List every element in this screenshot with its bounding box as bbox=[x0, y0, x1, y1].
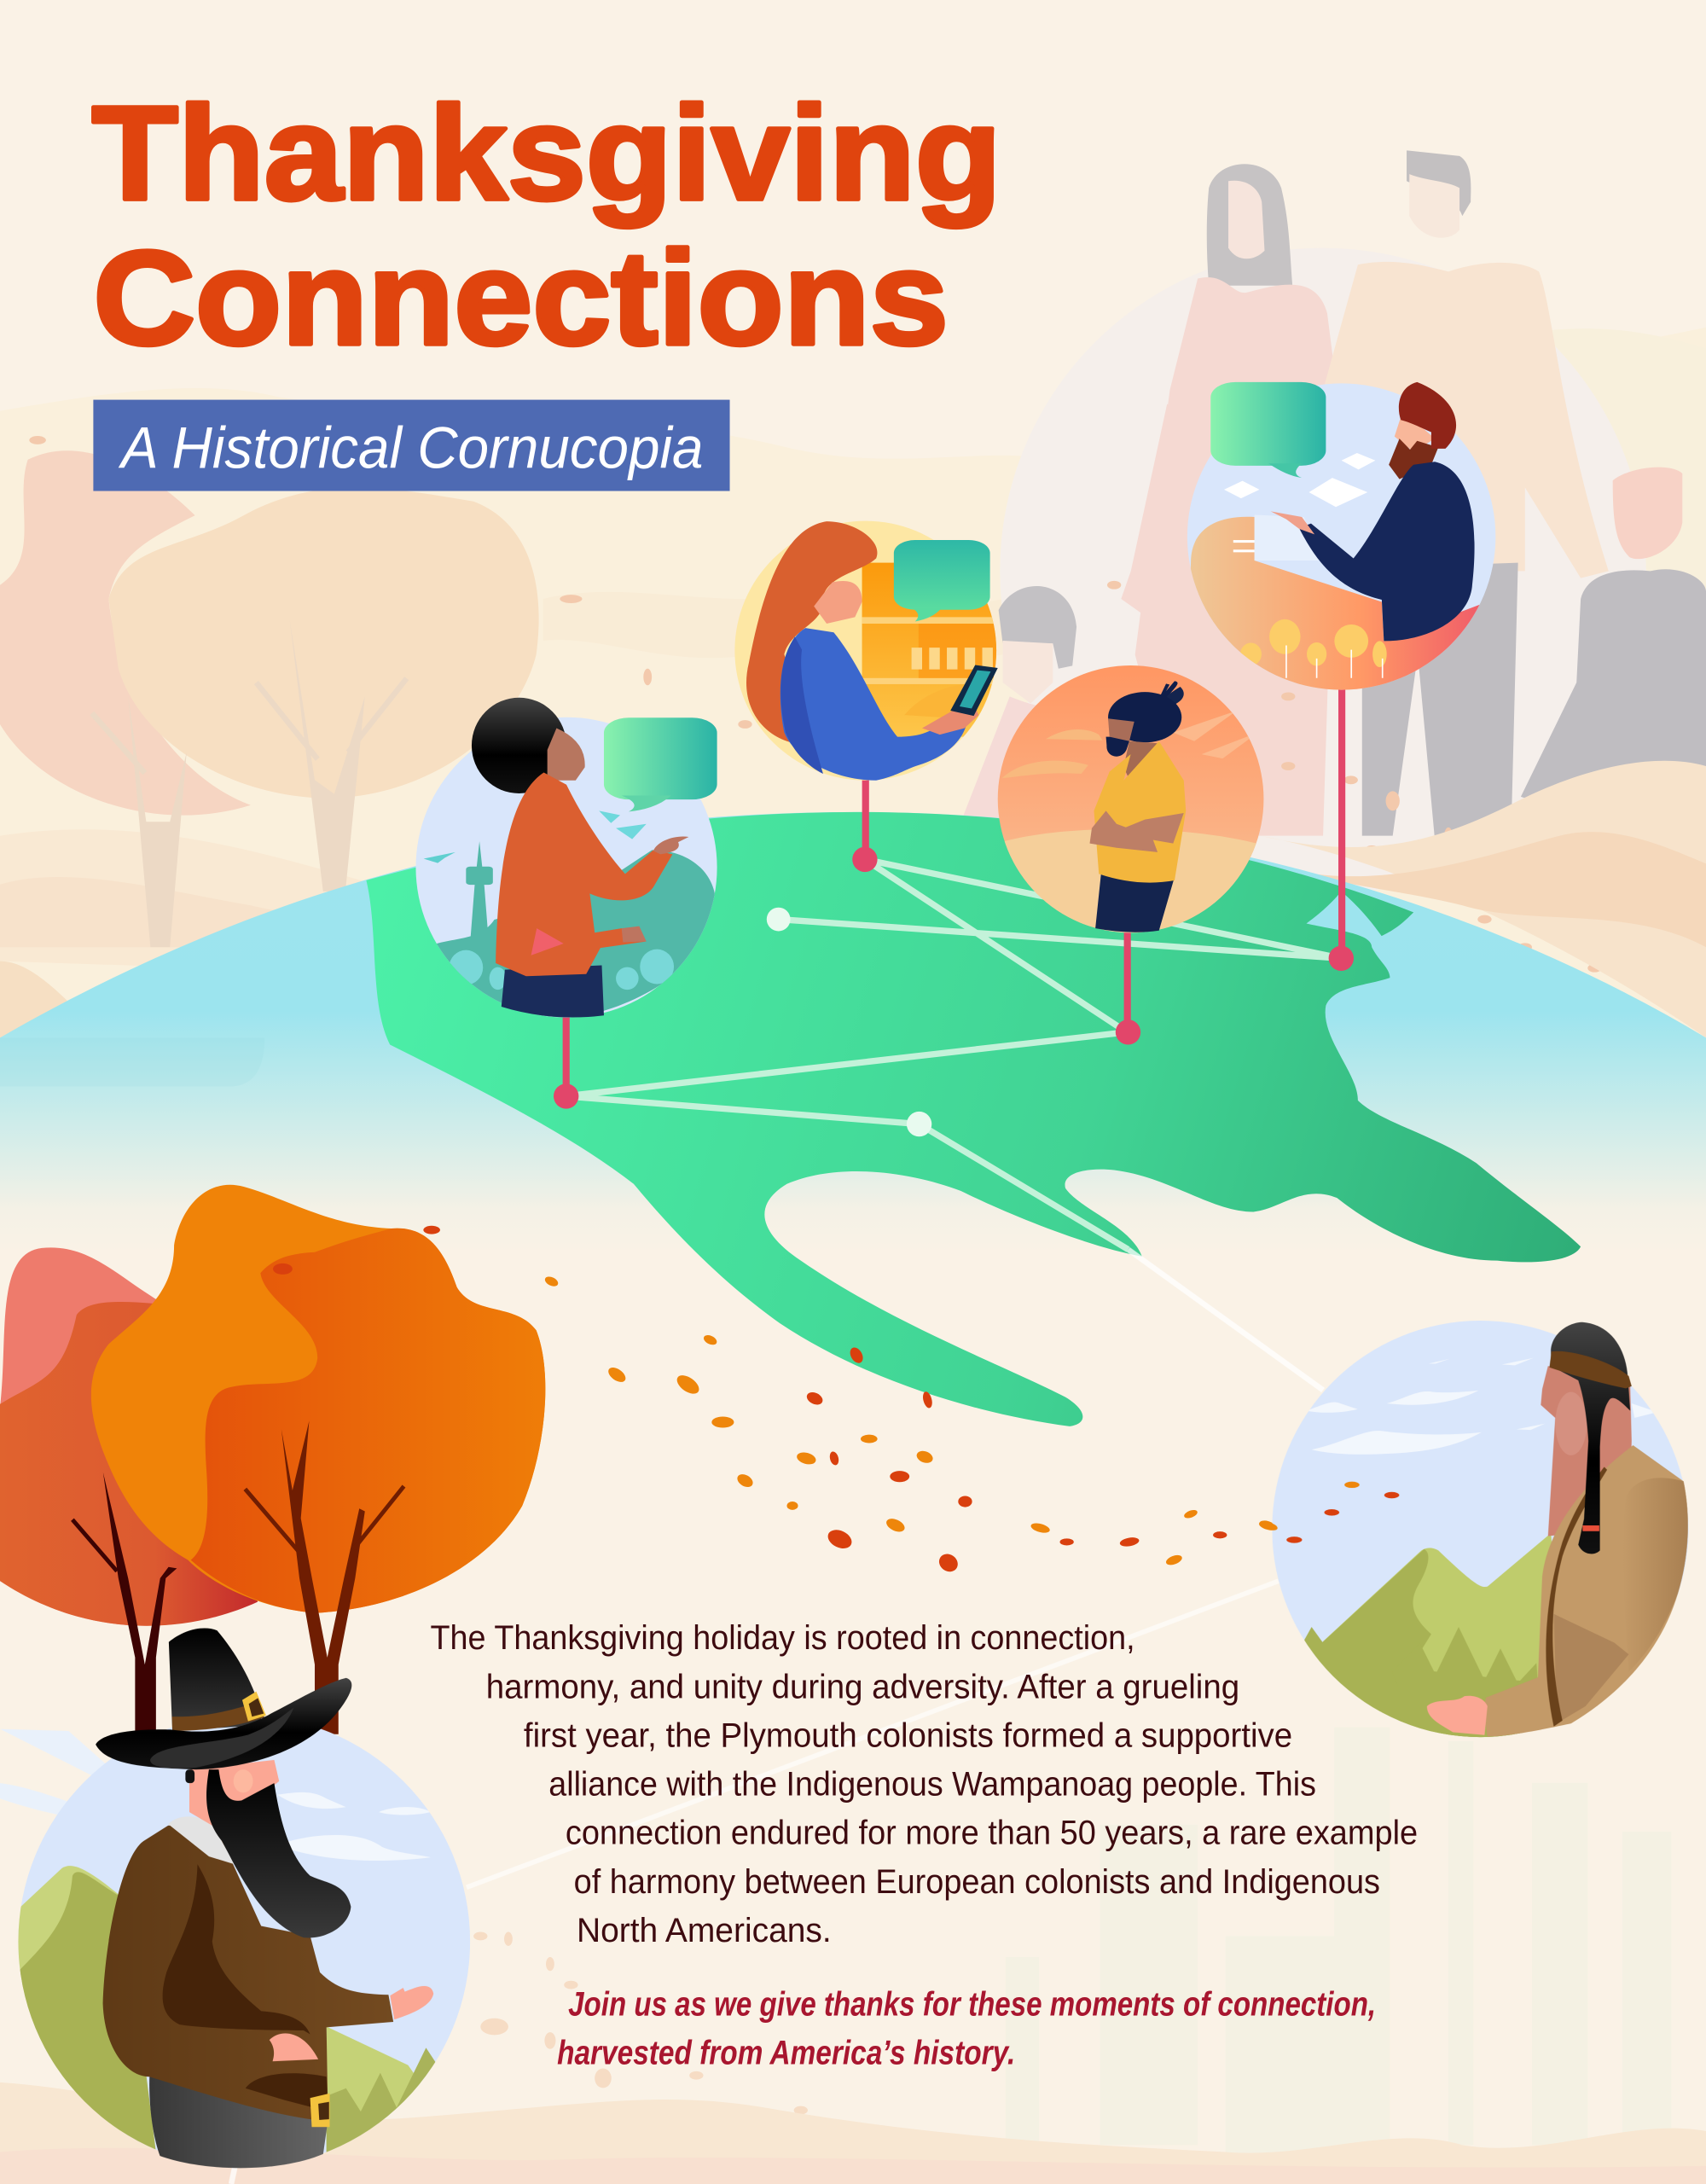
title line 1: Thanksgiving bbox=[92, 78, 1001, 228]
figure bbox=[1089, 681, 1186, 932]
face and beard bbox=[185, 1760, 351, 1937]
faded leaves bbox=[29, 436, 1649, 973]
faded hill over legs bbox=[1261, 761, 1706, 1037]
foreground autumn trees bbox=[0, 1185, 545, 1734]
closing call to action: harvested from America’s history. bbox=[557, 2035, 1015, 2072]
faded people bbox=[961, 150, 1706, 836]
person: phone woman bbox=[734, 521, 1000, 781]
teal scenery bbox=[424, 841, 716, 1018]
sky clouds trailing left bbox=[0, 1729, 186, 1827]
back red tree bbox=[0, 1247, 258, 1731]
title line 2: Connections bbox=[93, 224, 949, 373]
title bbox=[92, 78, 1001, 373]
circle with hills bbox=[18, 1716, 470, 2168]
body bbox=[1427, 1445, 1688, 1736]
person: yellow shirt bbox=[996, 665, 1265, 937]
bottom waves bbox=[0, 2082, 1706, 2184]
body text bbox=[431, 1619, 1418, 1949]
hat bbox=[96, 1628, 351, 1769]
front orange tree bbox=[91, 1185, 545, 1734]
store shelves bbox=[862, 563, 1000, 737]
network nodes bbox=[767, 908, 931, 1136]
person: orange sweater bbox=[415, 698, 717, 1018]
Wampanoag character bbox=[1254, 1321, 1688, 1758]
falling leaves bbox=[273, 1226, 1398, 1575]
closing call to action: Join us as we give thanks for these moments of connection, bbox=[568, 1986, 1376, 2024]
clouds bbox=[1224, 453, 1375, 507]
faded hills bbox=[0, 328, 1706, 1045]
globe bbox=[0, 812, 1706, 1253]
body text: North Americans. bbox=[577, 1912, 832, 1949]
head and neck bbox=[1541, 1366, 1632, 1536]
Pilgrim character bbox=[0, 1628, 473, 2184]
pins bbox=[554, 682, 1354, 1109]
body text: harmony, and unity during adversity. After a grueling bbox=[486, 1668, 1239, 1705]
figure bbox=[746, 521, 998, 781]
land and trees bbox=[1191, 515, 1479, 690]
hair and headband bbox=[1549, 1322, 1632, 1554]
network lines bbox=[566, 859, 1341, 1250]
white connection lines bbox=[231, 1250, 1323, 2184]
speech bubble bbox=[1210, 382, 1326, 478]
leaves in circle bbox=[1258, 1482, 1399, 1543]
body text: The Thanksgiving holiday is rooted in connection, bbox=[431, 1619, 1135, 1657]
figure bbox=[1271, 382, 1475, 641]
body text: of harmony between European colonists and Indigenous bbox=[574, 1863, 1380, 1901]
sunset scenery bbox=[996, 711, 1265, 937]
speech bubble bbox=[599, 717, 717, 839]
faint city at bottom bbox=[1006, 1728, 1671, 2159]
body text: first year, the Plymouth colonists formed a supportive bbox=[524, 1716, 1292, 1754]
body text: connection endured for more than 50 years, a rare example bbox=[566, 1815, 1418, 1852]
faded circle behind people bbox=[1000, 248, 1646, 894]
closing call to action bbox=[557, 1986, 1376, 2072]
continent bbox=[366, 812, 1581, 1426]
trousers bbox=[149, 2077, 328, 2168]
circle with hills bbox=[1272, 1321, 1688, 1737]
figure bbox=[472, 698, 688, 1017]
body text: alliance with the Indigenous Wampanoag people. This bbox=[548, 1766, 1316, 1804]
faded wave on right hill bbox=[1295, 832, 1706, 947]
subtitle banner bbox=[93, 400, 730, 491]
faded trees bbox=[0, 450, 539, 947]
person: navy sweater with beard bbox=[1187, 382, 1499, 698]
subtitle banner: A Historical Cornucopia bbox=[118, 415, 704, 481]
globe and map bbox=[0, 682, 1706, 2184]
speech bubble bbox=[894, 540, 990, 621]
coat bbox=[103, 1816, 433, 2127]
faded leaves near text bbox=[473, 1932, 808, 2114]
